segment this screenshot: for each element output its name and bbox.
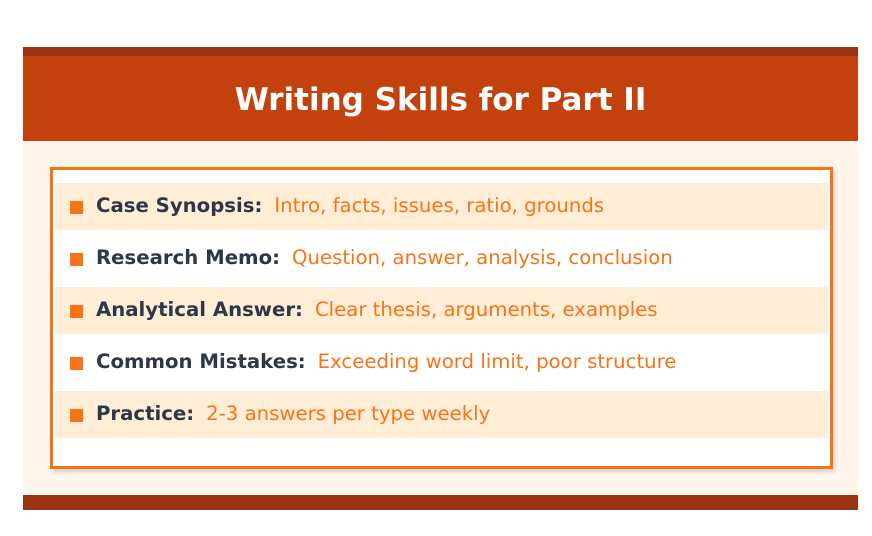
row: analytical answer [55, 287, 828, 334]
title: Writing Skills for Part II [235, 82, 646, 118]
row: practice: 2-3 answers per type weekly [206, 402, 490, 424]
row: research memo: Research Memo: [96, 246, 280, 268]
row: common mistakes: Exceeding word limit, poor structure [318, 350, 676, 372]
row: case synopsis [55, 183, 828, 230]
row: analytical answer: Analytical Answer: [96, 298, 303, 320]
row: analytical answer: Clear thesis, arguments, examples [315, 298, 658, 320]
panel: skills list [50, 167, 833, 469]
row: practice: Practice: [96, 402, 194, 424]
title [23, 56, 858, 141]
row: case synopsis: Intro, facts, issues, ratio, grounds [274, 194, 604, 216]
row: research memo: Question, answer, analysis, conclusion [292, 246, 673, 268]
row: case synopsis: Case Synopsis: [96, 194, 262, 216]
row: common mistakes: Common Mistakes: [96, 350, 306, 372]
row: practice [55, 391, 828, 438]
row: research memo [70, 246, 673, 268]
row: common mistakes [70, 350, 676, 372]
